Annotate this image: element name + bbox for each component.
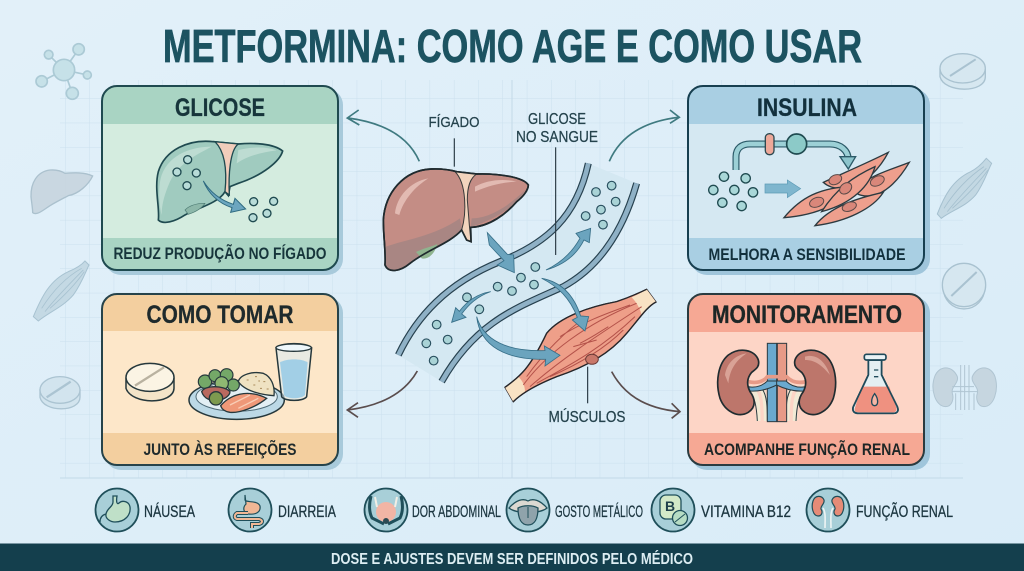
icon: liver with glucose leaving [157,141,283,222]
heading: monitoramento: MONITORAMENTO [712,301,902,329]
rice [238,373,274,396]
kidney left [718,350,759,415]
glass [276,344,312,400]
icon: faded muscle right [937,158,992,218]
greens [198,369,239,391]
label: glicose no sangue: GLICOSE [528,111,586,128]
icon: intestines [228,488,272,532]
label: vitamina b12: VITAMINA B12 [701,503,791,521]
salmon [221,393,267,412]
icon: faded tablet [940,54,985,89]
heading: como tomar: COMO TOMAR [146,301,294,329]
kidney right [795,350,836,415]
panel header: como tomar [102,294,338,331]
glucose dots [422,181,620,365]
vessels [767,343,777,422]
panel header: insulina [688,86,924,124]
arrow: liver to glicose panel [347,110,419,161]
flask [853,360,898,413]
icon: faded liver [31,170,93,214]
caption: insulina: MELHORA A SENSIBILIDADE [708,246,906,264]
icon: stomach [96,488,138,532]
arrows in the bloodstream [452,228,591,366]
icon: faded round pill [942,263,986,309]
icon: abdominal pain [364,488,408,532]
label: função renal: FUNÇÃO RENAL [856,501,953,521]
liver [383,169,528,270]
icon: tongue [506,488,550,532]
panel: monitoramento [688,294,930,470]
label: glicose no sangue [516,111,598,146]
label: diarreia: DIARREIA [278,503,336,521]
label: náusea: NÁUSEA [144,502,195,521]
arrow: blood to muscle lower [477,317,560,366]
label: fígado: FÍGADO [428,114,480,131]
arrow: blood to muscle [542,278,589,331]
label: gosto metálico: GOSTO METÁLICO [555,502,643,521]
panel: insulina [688,86,930,275]
decorative background icons: right [933,54,996,410]
decorative background icons: left [31,44,93,409]
icon: vitamin b12: B [665,498,675,514]
footer text: DOSE E AJUSTES DEVEM SER DEFINIDOS PELO MÉDICO [331,551,693,568]
roast [202,387,230,401]
footer bar [0,544,1024,571]
label: dor abdominal: DOR ABDOMINAL [412,503,501,521]
central diagram [347,110,680,418]
heading: glicose: GLICOSE [175,94,265,122]
icon: faded pill [40,377,80,409]
arrow: blood up [546,228,591,270]
icon: insulin receptor and muscle cells [709,134,909,226]
ureters [750,385,803,421]
arrow: muscle to monitoramento panel [612,372,680,418]
label: músculos: MÚSCULOS [548,409,626,426]
heading: insulina: INSULINA [757,94,857,122]
arrow: liver to blood [487,233,514,273]
panel header: monitoramento [688,294,924,332]
arrow: vessel to como tomar panel [347,371,417,417]
icon: vitamin b12 [652,488,694,532]
caption: glicose: REDUZ PRODUÇÃO NO FÍGADO [114,243,327,263]
callout lines [454,138,588,403]
caption: monitoramento: ACOMPANHE FUNÇÃO RENAL [704,439,910,459]
arrow: blood down left [452,292,491,322]
icon: faded kidneys [933,365,996,410]
icon: kidneys and flask [718,343,898,422]
plate [189,369,284,419]
arrow: vessel to insulina panel [609,110,679,161]
icon: pill, plate of food and glass of water [126,344,312,419]
panel: como tomar [102,294,343,470]
caption: como tomar: JUNTO ÀS REFEIÇÕES [144,439,296,459]
pill [126,363,174,401]
icon: faded muscle [33,261,89,321]
icon: kidneys small [806,488,850,532]
icon: molecule [36,44,91,99]
panel: glicose [102,86,343,275]
muscle [505,289,656,402]
side effects row [96,488,953,532]
blood vessel [398,163,637,382]
label: glicose no sangue: NO SANGUE [516,129,598,146]
panel header: glicose [102,86,338,124]
